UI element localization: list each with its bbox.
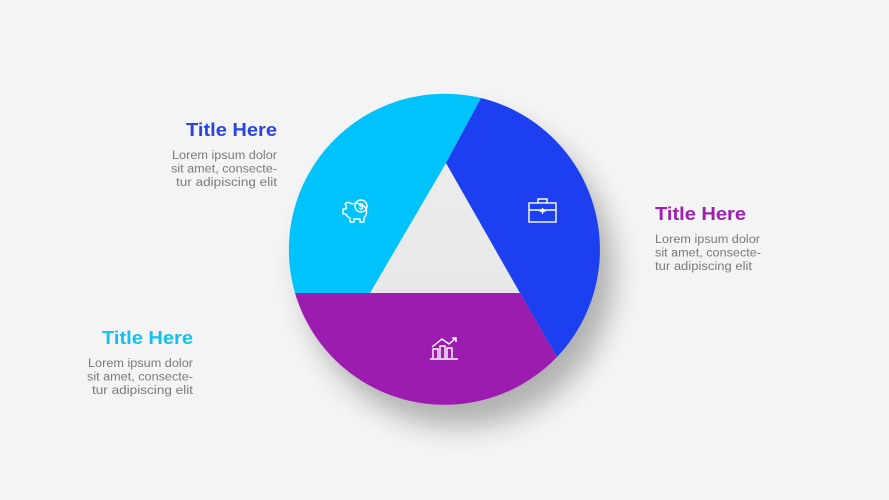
icon: briefcase (529, 199, 556, 222)
text block: top left (171, 120, 278, 189)
text block: right: Title Here (655, 204, 746, 224)
text block: bottom left: tur adipiscing elit (92, 385, 194, 397)
icon: piggy bank (343, 200, 367, 222)
text block: bottom left: sit amet, consecte- (87, 372, 193, 384)
icon: piggy bank: $ (358, 202, 364, 212)
text block: top left: Title Here (186, 120, 277, 140)
text block: right: sit amet, consecte- (655, 248, 761, 260)
segment: purple (295, 293, 557, 405)
segment: blue (446, 98, 600, 357)
segment: cyan (289, 94, 481, 293)
text block: right (655, 204, 761, 273)
text block: top left: sit amet, consecte- (171, 164, 277, 176)
center triangle (370, 163, 520, 293)
text block: bottom left: Title Here (102, 328, 193, 348)
text block: right: tur adipiscing elit (655, 261, 753, 273)
text block: top left: tur adipiscing elit (176, 177, 278, 189)
text block: right: Lorem ipsum dolor (655, 234, 760, 246)
text block: bottom left (87, 328, 194, 397)
text block: top left: Lorem ipsum dolor (172, 150, 277, 162)
icon: chart growth (430, 338, 458, 359)
text block: bottom left: Lorem ipsum dolor (88, 358, 193, 370)
pie chart (289, 94, 600, 405)
